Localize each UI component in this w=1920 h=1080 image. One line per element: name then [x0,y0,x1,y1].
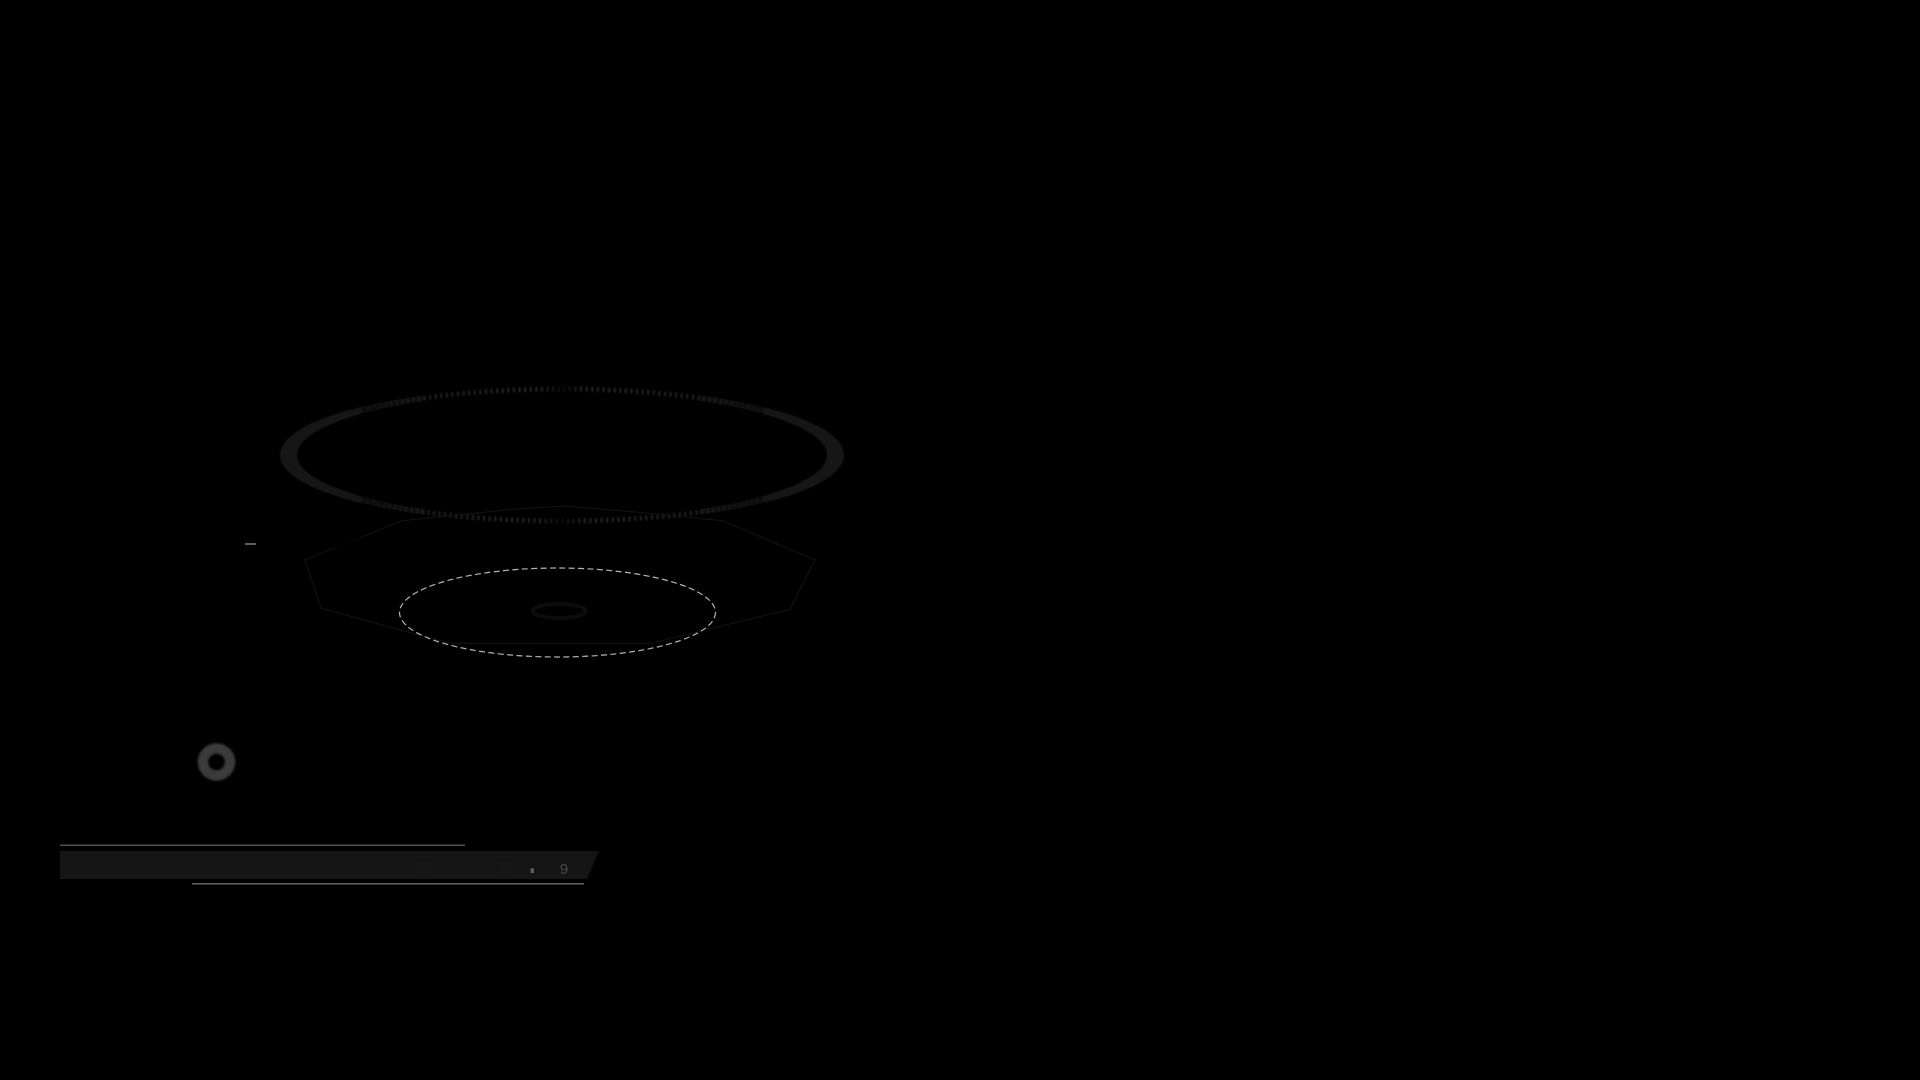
small mark [530,868,534,873]
decagon outline [305,506,815,643]
status bar [60,844,599,885]
bar bottom rule [192,883,584,885]
digit: 9 [559,862,569,879]
outer tick ring [280,386,844,524]
bar body [60,851,599,879]
dashed ellipse [400,568,716,657]
label dash [245,543,256,545]
faint label text band [80,540,415,548]
faint label line [80,540,415,548]
bar top rule [60,844,465,846]
centre faint ring [532,604,586,618]
faint blocks [416,862,432,873]
ring ticks [288,389,836,521]
ring crescent band [280,386,844,524]
ring marker [203,748,230,776]
